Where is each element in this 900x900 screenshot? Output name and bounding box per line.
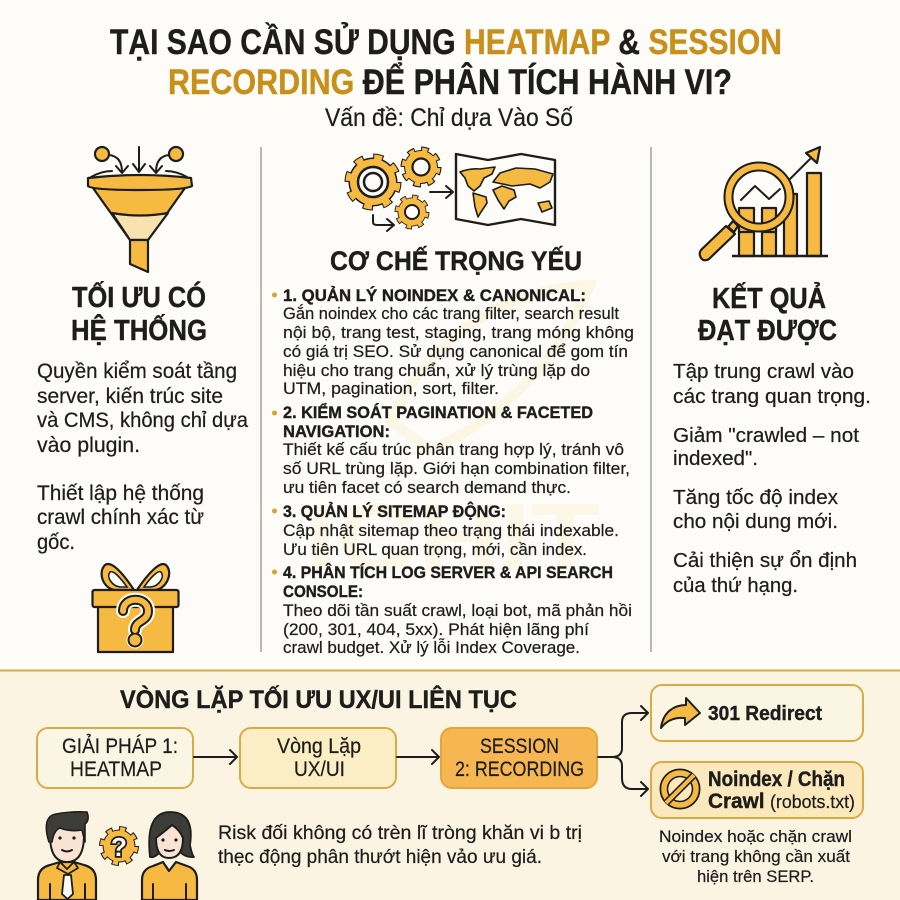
text block: mechanisms list: Thiết kế cấu trúc phân trang hợp lý, tránh vô	[283, 440, 624, 459]
icon: gears and world map	[348, 150, 555, 231]
subtitle: Vấn đề: Chỉ dựa Vào Số	[325, 104, 573, 132]
text block: mechanisms list: 2. KIỂM SOÁT PAGINATION & FACETED	[283, 403, 593, 422]
heading: Tối ưu có hệ thống	[71, 280, 207, 347]
text block: risk note: Risk đối không có trèn lĩ tròng khăn vi b trị	[218, 823, 582, 844]
text block: results: Tập trung crawl vào	[673, 360, 854, 383]
box: heatmap	[37, 728, 193, 788]
text block: left description: gốc.	[37, 531, 75, 554]
box: UX/UI loop: UX/UI	[294, 758, 345, 781]
box: session recording: 2: RECORDING	[455, 758, 584, 781]
title: RECORDING ĐỂ PHÂN TÍCH HÀNH VI?	[168, 62, 732, 102]
heading: Tối ưu có hệ thống: TỐI ƯU CÓ	[72, 280, 206, 314]
text block: mechanisms list: UTM, pagination, sort, filter.	[283, 379, 499, 398]
text block: mechanisms list: nội bộ, trang test, staging, trang móng không	[283, 323, 634, 342]
title	[110, 22, 782, 102]
text block: left description: và CMS, không chỉ dựa	[37, 409, 248, 432]
box: 301 redirect: 301 Redirect	[708, 703, 822, 725]
text block: mechanisms list: 1. QUẢN LÝ NOINDEX & CANONICAL:	[283, 286, 586, 305]
box: heatmap: HEATMAP	[70, 758, 162, 781]
text block: left description: vào plugin.	[37, 434, 140, 457]
text block: results: các trang quan trọng.	[673, 385, 871, 408]
text block: results: của thứ hạng.	[673, 574, 798, 597]
text block: mechanisms list: Cập nhật sitemap theo trạng thái indexable.	[283, 521, 619, 540]
text block: mechanisms list: CONSOLE:	[283, 582, 363, 601]
panel: right column	[673, 147, 871, 597]
text block: mechanisms list: số URL trùng lặp. Giới hạn combination filter,	[283, 459, 630, 478]
box: session recording: SESSION	[480, 735, 559, 758]
arrow: split to outcomes	[598, 706, 648, 796]
text block: mechanisms list: 4. PHÂN TÍCH LOG SERVER & API SEARCH	[283, 563, 613, 582]
icon: curved arrow	[661, 698, 700, 728]
icon: funnel	[88, 147, 192, 272]
text block: left description: server, kiến trúc site	[37, 385, 223, 408]
text block: results	[673, 360, 871, 597]
title: TẠI SAO CẦN SỬ DỤNG HEATMAP & SESSION	[110, 22, 782, 62]
text block: mechanisms list: 3. QUẢN LÝ SITEMAP ĐỘNG:	[283, 502, 506, 521]
text block: risk note	[218, 823, 582, 868]
box: noindex: Noindex / Chặn	[708, 768, 845, 791]
box: heatmap: GIẢI PHÁP 1:	[62, 735, 178, 758]
heading: Kết quả đạt được: ĐẠT ĐƯỢC	[698, 315, 837, 347]
text block: mechanisms list: NAVIGATION:	[283, 422, 390, 441]
heading: UX/UI loop: VÒNG LẶP TỐI ƯU UX/UI LIÊN TỤC	[120, 684, 517, 714]
text block: mechanisms list: hiệu cho trang chuẩn, xử lý trùng lặp do	[283, 361, 590, 380]
watermark	[305, 285, 600, 591]
box: UX/UI loop	[240, 728, 396, 788]
text block: results: Cải thiện sự ổn định	[673, 549, 857, 572]
panel: bottom band	[0, 670, 900, 900]
icon: two people and gear: ?	[111, 832, 127, 862]
text block: mechanisms list: ưu tiên facet có search demand thực.	[283, 478, 571, 497]
text block: mechanisms list: (200, 301, 404, 5xx). Phát hiện lãng phí	[283, 620, 589, 639]
text block: mechanisms list: có giá trị SEO. Sử dụng canonical để gom tín	[283, 342, 628, 361]
heading: Cơ chế trọng yếu: CƠ CHẾ TRỌNG YẾU	[330, 245, 582, 276]
text block: left description: Thiết lập hệ thống	[37, 482, 204, 505]
watermark: ICHIT	[305, 484, 600, 591]
panel: middle column	[272, 150, 634, 657]
text block: results: indexed".	[673, 447, 758, 470]
panel: left column	[37, 147, 248, 652]
text block: noindex note	[659, 827, 852, 886]
box: 301 redirect	[651, 685, 863, 741]
box: session recording	[441, 728, 597, 788]
icon: gift box with question mark	[92, 564, 178, 652]
text block: results: cho nội dung mới.	[673, 510, 838, 533]
text block: mechanisms list	[272, 286, 634, 657]
box: UX/UI loop: Vòng Lặp	[277, 735, 361, 758]
text block: left description: crawl chính xác từ	[37, 506, 204, 529]
text block: noindex note: với trang không cần xuất	[662, 847, 850, 866]
text block: mechanisms list: Ưu tiên URL quan trọng, mới, cần index.	[283, 540, 587, 559]
text block: noindex note: hiện trên SERP.	[697, 867, 814, 886]
text block: noindex note: Noindex hoặc chặn crawl	[659, 827, 852, 846]
text block: mechanisms list: Gắn noindex cho các trang filter, search result	[283, 304, 619, 323]
box: noindex	[651, 762, 863, 818]
icon: two people and gear	[38, 812, 197, 900]
heading: Kết quả đạt được: KẾT QUẢ	[712, 281, 826, 315]
text block: left description: Quyền kiểm soát tầng	[37, 360, 237, 383]
heading: Kết quả đạt được	[698, 281, 837, 347]
text block: results: Giảm "crawled – not	[673, 424, 859, 447]
arrow	[194, 750, 237, 764]
arrow	[397, 750, 439, 764]
icon: magnifier over bar chart	[700, 147, 828, 260]
text block: mechanisms list: Theo dõi tần suất crawl, loại bot, mã phản hồi	[283, 601, 632, 620]
text block: results: Tăng tốc độ index	[673, 486, 839, 509]
text block: left description	[37, 360, 248, 554]
box: noindex: Crawl (robots.txt)	[708, 790, 855, 813]
text block: risk note: thẹc động phân thướt hiện vảo ưu giá.	[218, 847, 542, 868]
heading: Tối ưu có hệ thống: HỆ THỐNG	[71, 313, 207, 347]
icon: prohibition sign	[660, 770, 700, 808]
text block: mechanisms list: crawl budget. Xử lý lỗi Index Coverage.	[283, 638, 580, 657]
